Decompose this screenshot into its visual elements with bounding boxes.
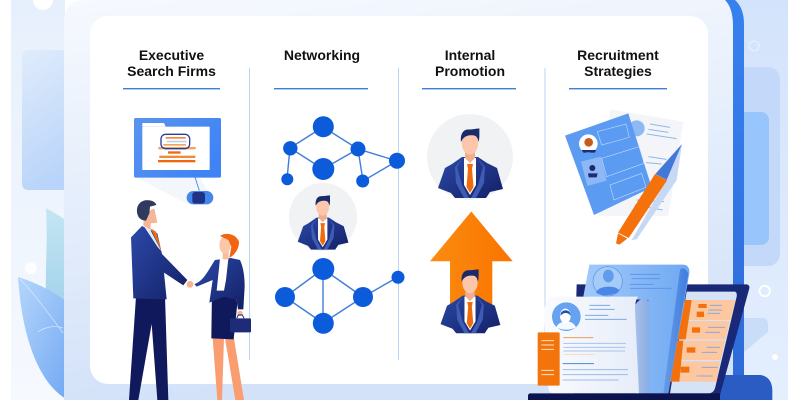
orange list rows	[670, 300, 735, 382]
portrait: networking contact	[289, 183, 357, 251]
laptop screen	[670, 292, 737, 393]
back resume	[598, 109, 683, 216]
handshake	[187, 281, 193, 288]
heading: Executive Search Firms	[123, 47, 220, 89]
orange side tab	[538, 332, 560, 386]
white content panel	[90, 16, 708, 384]
decorative white circle top left	[33, 0, 53, 10]
heading: Networking	[274, 47, 368, 89]
back resume sheet	[583, 265, 689, 393]
icon: search firm screen	[134, 118, 221, 204]
network diagram: top	[281, 116, 405, 188]
heading: Internal Promotion	[422, 47, 516, 89]
heading: Recruitment Strategies: Strategies	[584, 63, 652, 79]
illustration: laptop with resumes	[528, 265, 772, 400]
heading: Networking: Networking	[284, 47, 360, 63]
heading: Recruitment Strategies	[569, 47, 667, 89]
decorative left panel	[22, 50, 82, 190]
woman	[194, 234, 251, 400]
heading: Executive Search Firms: Search Firms	[127, 63, 216, 79]
decorative rings and dots	[749, 41, 778, 360]
arrow: upward promotion	[430, 212, 513, 305]
illustration: man and woman shaking hands	[129, 200, 251, 400]
heading: Internal Promotion: Internal	[445, 47, 495, 63]
column dividers	[250, 68, 545, 360]
front resume sheet	[544, 297, 639, 393]
portrait: promoted employee	[441, 269, 500, 333]
device blue edge	[725, 0, 744, 400]
decorative plant leaves	[18, 208, 72, 400]
heading: Executive Search Firms: Executive	[139, 47, 204, 63]
decorative right panels	[720, 67, 780, 352]
front resume	[565, 113, 652, 215]
icon: resumes and pen	[565, 109, 683, 245]
portrait: internal candidate	[427, 114, 513, 200]
pen	[616, 144, 682, 245]
network diagram: bottom	[275, 258, 404, 334]
laptop lid	[573, 284, 749, 395]
heading: Internal Promotion: Promotion	[435, 63, 505, 79]
laptop hinge block	[720, 375, 772, 400]
laptop base	[528, 393, 720, 400]
curled page	[635, 268, 688, 393]
man	[129, 200, 187, 400]
heading: Recruitment Strategies: Recruitment	[577, 47, 659, 63]
